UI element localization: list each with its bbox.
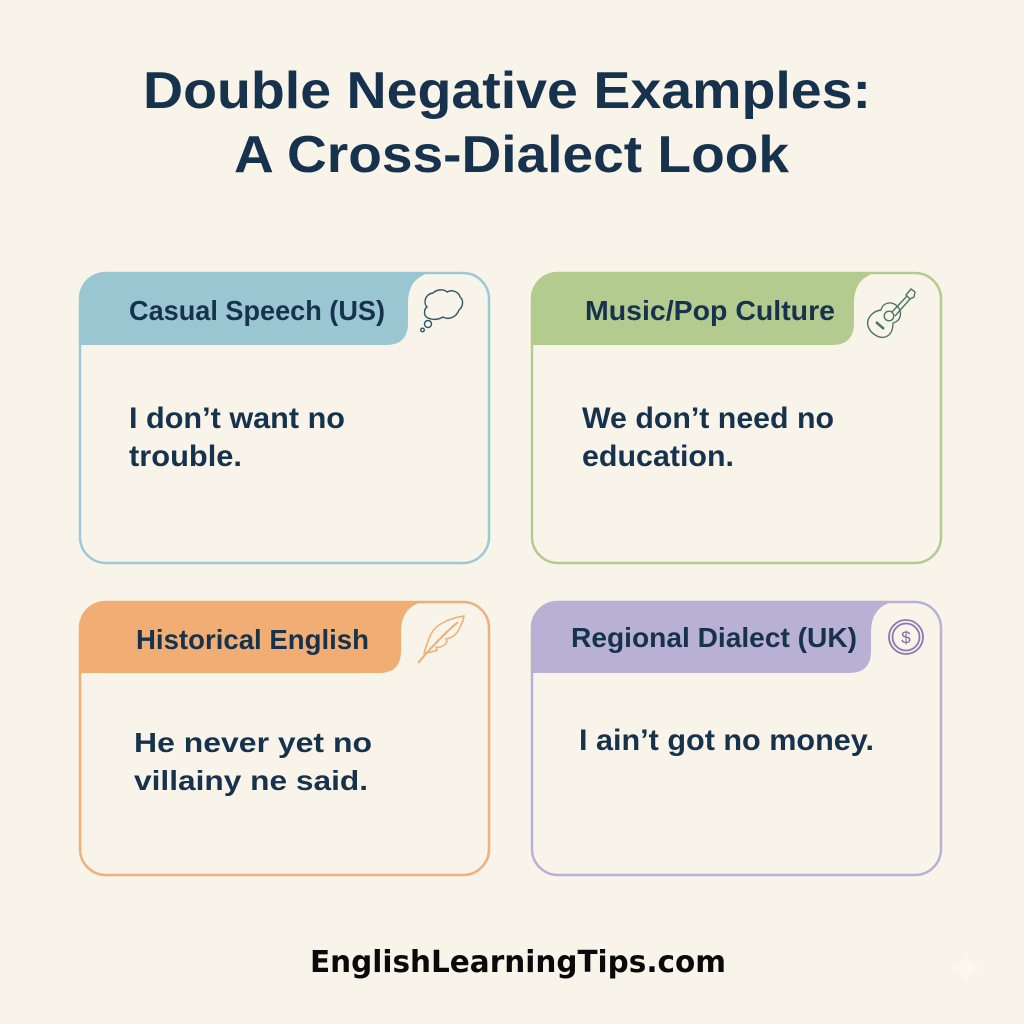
icon: thought bubble — [421, 290, 463, 332]
example text: We don’t need no — [582, 402, 834, 435]
heading: Regional Dialect (UK) — [571, 622, 857, 653]
card outline — [532, 602, 941, 875]
example text: villainy ne said. — [134, 765, 368, 796]
icon: faint sparkle — [950, 952, 982, 984]
example text — [582, 402, 834, 473]
example text: He never yet no — [134, 727, 372, 758]
heading: Music/Pop Culture — [585, 295, 835, 326]
icon: coin — [889, 620, 923, 654]
icon: guitar — [868, 289, 915, 337]
icon: coin: $ — [901, 628, 911, 647]
example text: I ain’t got no money. — [579, 724, 874, 757]
title: A Cross-Dialect Look — [234, 126, 789, 184]
panel: historical english — [79, 601, 489, 875]
example text: education. — [582, 440, 734, 473]
card outline — [532, 273, 941, 563]
icon: feather quill — [418, 616, 464, 663]
panel: music and pop culture — [531, 272, 941, 563]
example text — [129, 402, 345, 473]
title: Double Negative Examples: — [143, 62, 871, 120]
card outline — [80, 273, 489, 563]
header tab — [79, 601, 427, 673]
heading: Casual Speech (US) — [129, 295, 385, 326]
header tab — [79, 272, 434, 345]
header tab — [531, 601, 897, 673]
panel: regional dialect — [531, 601, 941, 875]
example text: I don’t want no — [129, 402, 345, 435]
panel: casual speech — [79, 272, 489, 563]
example text — [134, 727, 372, 796]
heading: Historical English — [136, 624, 369, 655]
example text: trouble. — [129, 440, 242, 473]
header tab — [531, 272, 880, 345]
footer website: EnglishLearningTips.com — [310, 945, 726, 980]
card outline — [80, 602, 489, 875]
title — [143, 62, 871, 184]
